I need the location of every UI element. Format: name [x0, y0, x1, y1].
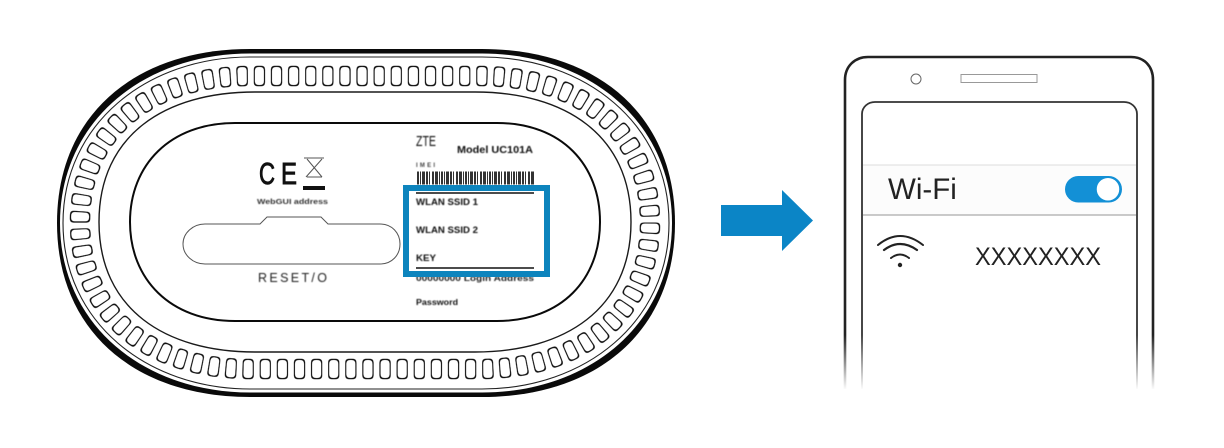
phone body [845, 57, 1153, 400]
CE mark: C [259, 156, 275, 191]
router device [57, 49, 675, 397]
router outer shell [57, 49, 675, 397]
reset label: RESET/O [258, 271, 327, 285]
phone [835, 57, 1165, 409]
wifi network icon [878, 236, 923, 267]
small label text: WebGUI address [257, 197, 328, 206]
barcode gaps [416, 172, 534, 184]
vent ring inner line [99, 92, 631, 352]
WLAN SSID 2: WLAN SSID 2 [416, 225, 478, 235]
SSID text blocks [416, 274, 535, 307]
reset slot [183, 217, 400, 264]
phone fade [835, 335, 1165, 390]
arrow [721, 190, 813, 251]
network name: XXXXXXXX [975, 243, 1101, 271]
toggle [1065, 176, 1122, 202]
wifi row [863, 165, 1136, 215]
WEEE icon [303, 158, 325, 190]
barcode [416, 172, 534, 184]
wifi label: Wi-Fi [888, 173, 957, 206]
CE mark [259, 156, 297, 191]
wifi password line: 00000000 Login Address [416, 274, 535, 283]
ZTE brand: ZTE [416, 133, 436, 150]
password label: Password [416, 298, 458, 307]
router shell inner rim [63, 57, 669, 389]
speaker [961, 74, 1037, 82]
label panel [130, 123, 600, 321]
IMEI text: IMEI [416, 163, 435, 169]
model text: Model UC101A [457, 145, 533, 156]
WLAN SSID 1: WLAN SSID 1 [416, 197, 478, 207]
ventilation slots [80, 76, 650, 369]
KEY: KEY [416, 253, 436, 263]
screen [862, 102, 1137, 400]
router shell inner face [60, 54, 672, 392]
blue highlight box [406, 188, 547, 274]
CE mark: E [281, 156, 297, 191]
highlighted credentials [416, 193, 534, 268]
camera [911, 74, 921, 84]
